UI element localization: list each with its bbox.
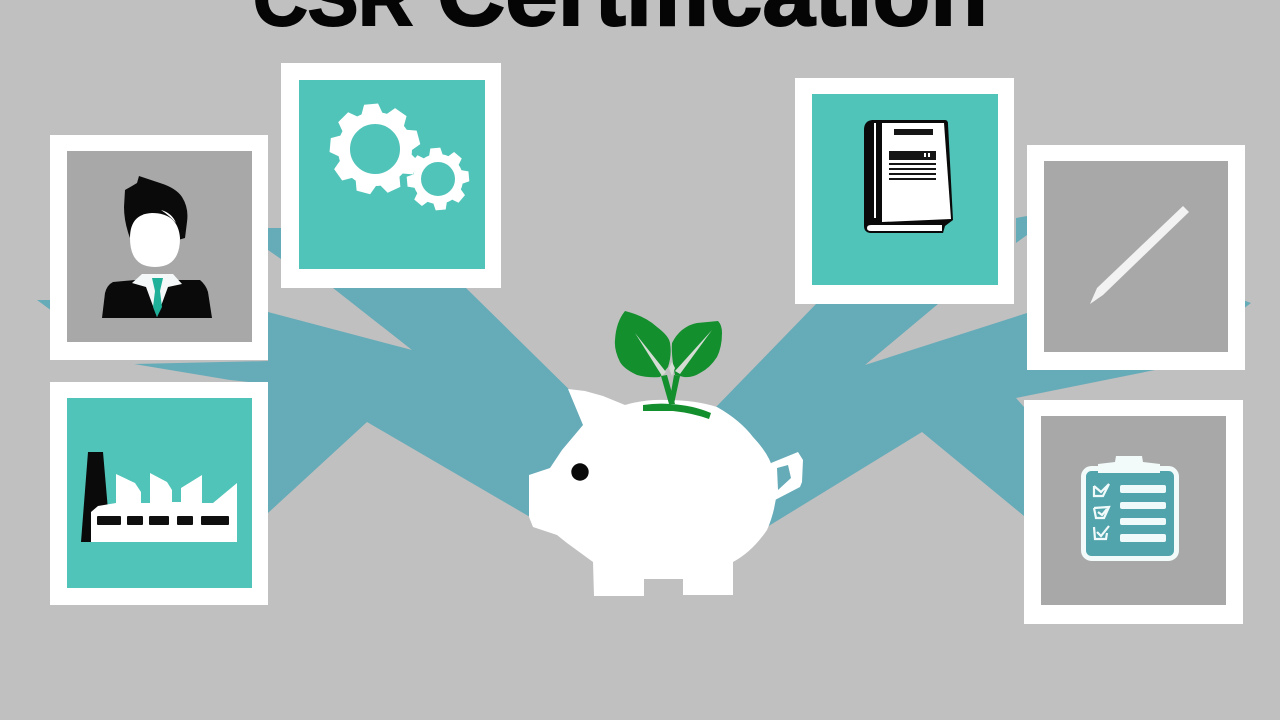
icon: clipboard checklist xyxy=(1084,456,1176,558)
icon: piggy bank with sprout xyxy=(529,311,803,596)
piggy bank body xyxy=(529,389,803,596)
icon: pencil xyxy=(1090,206,1189,304)
panel: checklist xyxy=(1024,400,1243,624)
icon: factory xyxy=(81,452,237,542)
panel: person xyxy=(50,135,268,360)
icon: book xyxy=(864,120,953,233)
panel: book xyxy=(795,78,1014,304)
panel: factory xyxy=(50,382,268,605)
panel: pencil xyxy=(1027,145,1245,370)
icon: businessperson xyxy=(102,176,212,318)
tail hole xyxy=(777,465,791,490)
teal arrows converging on the piggy bank xyxy=(37,216,1251,527)
icon: gears xyxy=(329,103,469,210)
panel: gears xyxy=(281,63,501,288)
green sprout xyxy=(615,311,722,419)
eye xyxy=(571,463,589,481)
